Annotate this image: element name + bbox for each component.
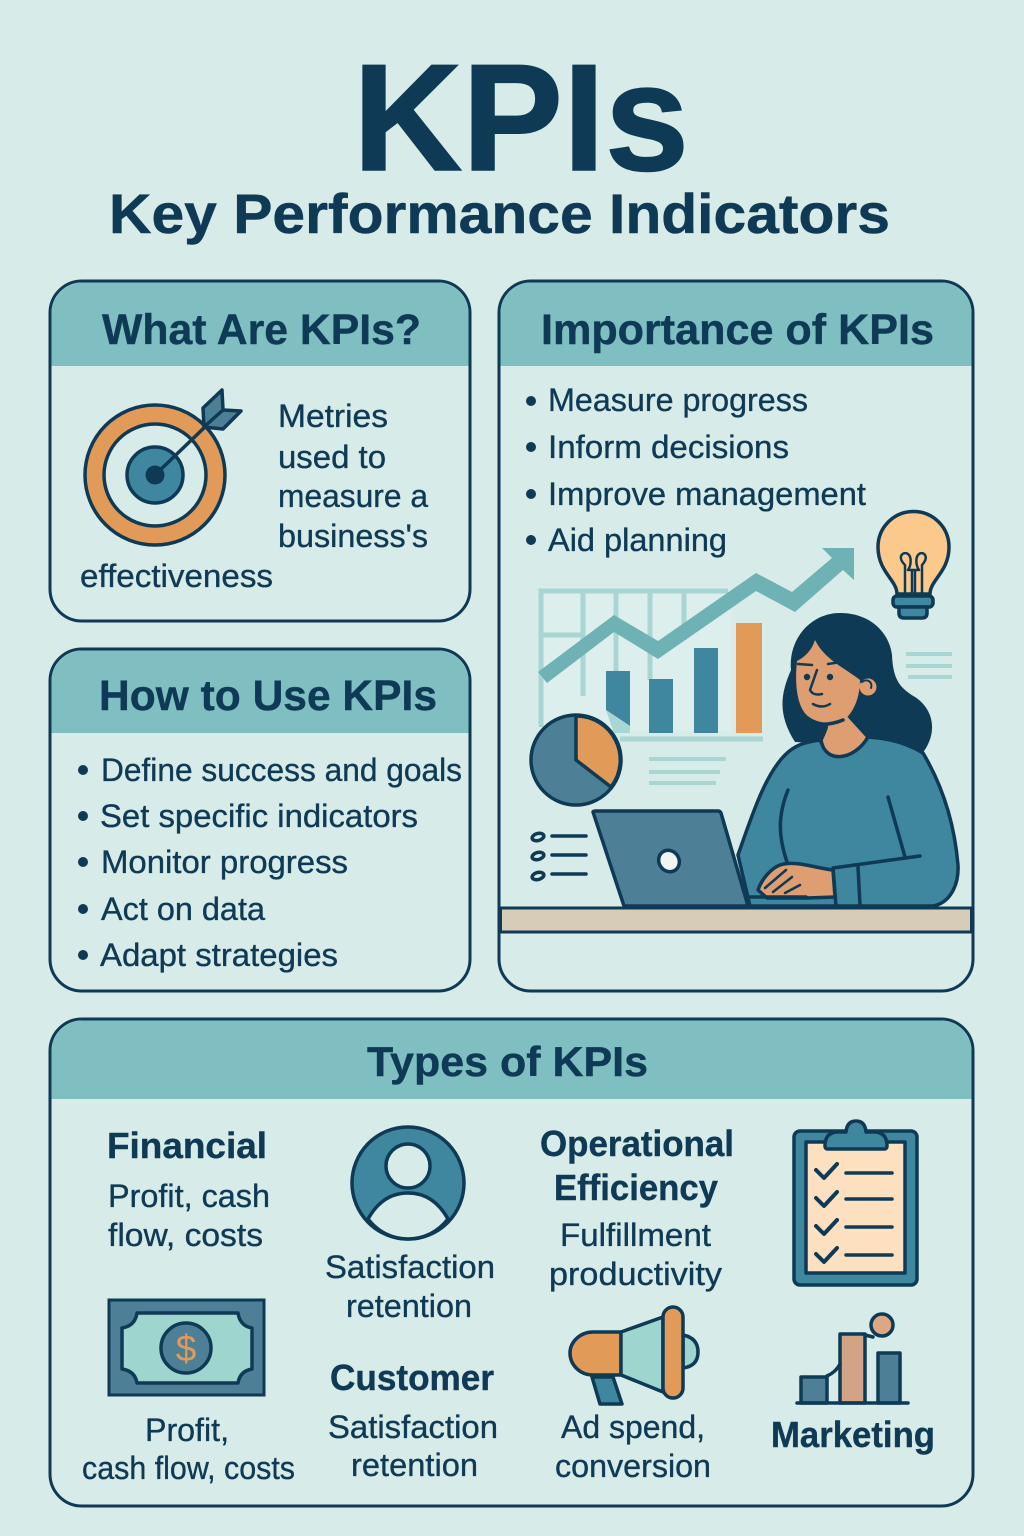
financial text bbox=[107, 1125, 270, 1253]
definition text bbox=[80, 398, 428, 594]
panel frame bbox=[50, 649, 470, 991]
bullet list: Improve management bbox=[548, 476, 866, 512]
eyes and features bbox=[804, 674, 810, 680]
operational efficiency text: Operational bbox=[540, 1123, 734, 1164]
customer text: Customer bbox=[330, 1357, 494, 1398]
panel frame bbox=[50, 1019, 973, 1506]
definition text: Metries bbox=[278, 398, 388, 434]
definition text: used to bbox=[278, 439, 386, 475]
bullet list bbox=[526, 382, 866, 558]
ear bbox=[860, 678, 876, 696]
neck bbox=[821, 715, 868, 757]
operational efficiency text: productivity bbox=[549, 1256, 722, 1292]
marketing caption: Ad spend, bbox=[561, 1409, 705, 1445]
title: KPIs bbox=[353, 33, 689, 203]
panel: how to use KPIs bbox=[50, 649, 470, 991]
illustration: woman at laptop bbox=[593, 613, 958, 906]
icon: customer avatar bbox=[352, 1127, 464, 1239]
bullet list: Adapt strategies bbox=[100, 937, 338, 973]
bullet list: Inform decisions bbox=[548, 429, 789, 465]
definition text: measure a bbox=[278, 478, 428, 514]
customer caption upper bbox=[325, 1249, 495, 1324]
customer text: retention bbox=[351, 1447, 478, 1483]
definition text: effectiveness bbox=[80, 558, 273, 594]
panel: types of KPIs bbox=[50, 1019, 973, 1506]
bullet list: Define success and goals bbox=[101, 752, 462, 788]
panel frame bbox=[499, 281, 973, 991]
bullet list: Aid planning bbox=[548, 522, 727, 558]
panel header band bbox=[52, 650, 468, 733]
face bbox=[796, 640, 860, 723]
heading: What Are KPIs? bbox=[102, 306, 421, 354]
bullet list bbox=[78, 752, 462, 973]
financial caption: Profit, bbox=[145, 1412, 229, 1448]
icon: target with arrow bbox=[85, 390, 241, 545]
panel: importance of KPIs bbox=[499, 281, 973, 991]
marketing caption: conversion bbox=[555, 1448, 711, 1484]
icon: marketing bar chart bbox=[797, 1314, 908, 1403]
desk bbox=[500, 908, 972, 932]
financial text: flow, costs bbox=[108, 1217, 263, 1253]
laptop bbox=[593, 811, 748, 906]
chart: grid, bars and rising arrow bbox=[538, 548, 854, 739]
bullet list: Set specific indicators bbox=[100, 798, 418, 834]
heading: Importance of KPIs bbox=[541, 306, 934, 354]
sweater bbox=[738, 737, 958, 906]
customer text: Satisfaction bbox=[328, 1409, 498, 1445]
icon: banknote: $ bbox=[176, 1328, 196, 1369]
chart: pie bbox=[531, 715, 621, 805]
operational efficiency text: Efficiency bbox=[554, 1167, 718, 1208]
panel: what are KPIs bbox=[50, 281, 470, 621]
panel frame bbox=[50, 281, 470, 621]
subtitle: Key Performance Indicators bbox=[109, 182, 890, 245]
marketing label: Marketing bbox=[771, 1414, 935, 1455]
operational efficiency text bbox=[540, 1123, 734, 1292]
customer text bbox=[328, 1357, 498, 1483]
customer caption upper: Satisfaction bbox=[325, 1249, 495, 1285]
panel header band bbox=[500, 282, 972, 366]
icon: small list bbox=[531, 832, 586, 881]
financial caption bbox=[82, 1412, 295, 1486]
hand bbox=[758, 863, 835, 898]
bullet list: Act on data bbox=[101, 891, 265, 927]
decorative text lines, right bbox=[906, 654, 952, 677]
icon: megaphone bbox=[570, 1307, 698, 1404]
hair bbox=[782, 613, 932, 755]
bullet list: Measure progress bbox=[548, 382, 808, 418]
panel header band bbox=[52, 282, 468, 366]
financial caption: cash flow, costs bbox=[82, 1450, 295, 1486]
operational efficiency text: Fulfillment bbox=[560, 1217, 711, 1253]
icon: clipboard bbox=[794, 1121, 917, 1285]
sleeve and fold lines bbox=[780, 790, 920, 906]
icon: banknote bbox=[109, 1300, 264, 1395]
definition text: business's bbox=[278, 518, 428, 554]
marketing caption bbox=[555, 1409, 711, 1484]
icon: light bulb bbox=[878, 511, 949, 618]
customer caption upper: retention bbox=[346, 1288, 472, 1324]
bullet list: Monitor progress bbox=[101, 844, 348, 880]
financial text: Profit, cash bbox=[108, 1178, 270, 1214]
panel header band bbox=[52, 1020, 972, 1099]
heading: How to Use KPIs bbox=[99, 672, 437, 720]
heading: Types of KPIs bbox=[367, 1038, 648, 1085]
decorative text lines, center bbox=[649, 759, 726, 783]
financial text: Financial bbox=[107, 1125, 267, 1166]
